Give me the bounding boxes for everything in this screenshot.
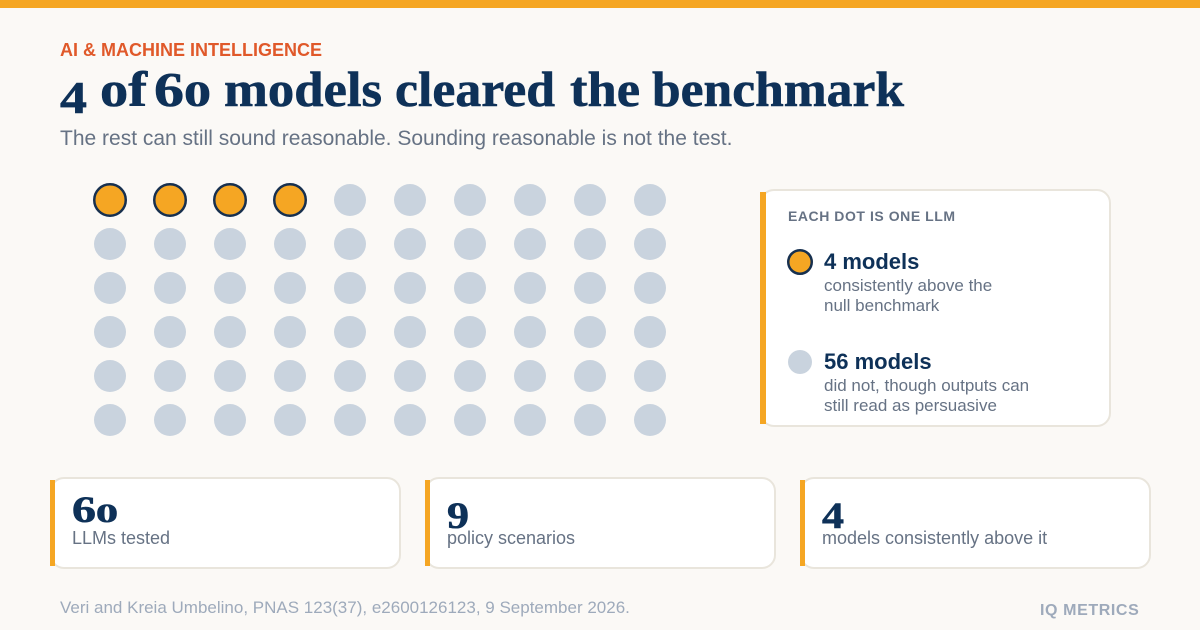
top accent bar bbox=[0, 0, 1200, 8]
legend entry: 56 models: 56 models bbox=[824, 349, 932, 374]
panel: legend bbox=[760, 189, 1111, 427]
stat card: 60 LLMs tested bbox=[50, 477, 401, 569]
legend icon: grey dot bbox=[788, 350, 812, 374]
stat card: 4 models consistently above it bbox=[800, 477, 1151, 569]
title: the bbox=[570, 61, 640, 117]
legend entry: 56 models bbox=[824, 349, 1029, 415]
title: cleared bbox=[395, 61, 555, 117]
legend entry: 56 models: still read as persuasive bbox=[824, 396, 997, 415]
source citation: Veri and Kreia Umbelino, PNAS 123(37), e2600126123, 9 September 2026. bbox=[60, 598, 630, 617]
legend heading: EACH DOT IS ONE LLM bbox=[788, 208, 956, 224]
stat number: 0 bbox=[96, 499, 118, 528]
stat card: 9 policy scenarios bbox=[425, 477, 776, 569]
title bbox=[60, 61, 904, 123]
brand mark: IQ METRICS bbox=[1040, 602, 1139, 619]
legend entry: 56 models: did not, though outputs can bbox=[824, 376, 1029, 395]
stat number bbox=[72, 490, 118, 531]
title: models bbox=[224, 61, 382, 117]
stat label: models consistently above it bbox=[822, 528, 1047, 548]
title: 4 bbox=[60, 72, 87, 123]
stat number: 9 bbox=[447, 496, 469, 537]
legend entry: 4 models: null benchmark bbox=[824, 296, 939, 315]
legend entry: 4 models bbox=[824, 249, 992, 315]
title: of bbox=[100, 61, 149, 117]
stat number: 4 bbox=[822, 496, 844, 537]
stat label: policy scenarios bbox=[447, 528, 575, 548]
eyebrow: AI & MACHINE INTELLIGENCE bbox=[60, 40, 322, 60]
stat label: LLMs tested bbox=[72, 528, 170, 548]
title: 6 bbox=[154, 62, 184, 117]
legend entry: 4 models: 4 models bbox=[824, 249, 919, 274]
title: benchmark bbox=[652, 61, 904, 117]
legend entry: 4 models: consistently above the bbox=[824, 276, 992, 295]
legend icon: orange dot bbox=[787, 249, 813, 275]
stat number: 6 bbox=[72, 490, 96, 531]
subtitle: The rest can still sound reasonable. Sounding reasonable is not the test. bbox=[60, 127, 732, 150]
title: 0 bbox=[184, 74, 211, 114]
